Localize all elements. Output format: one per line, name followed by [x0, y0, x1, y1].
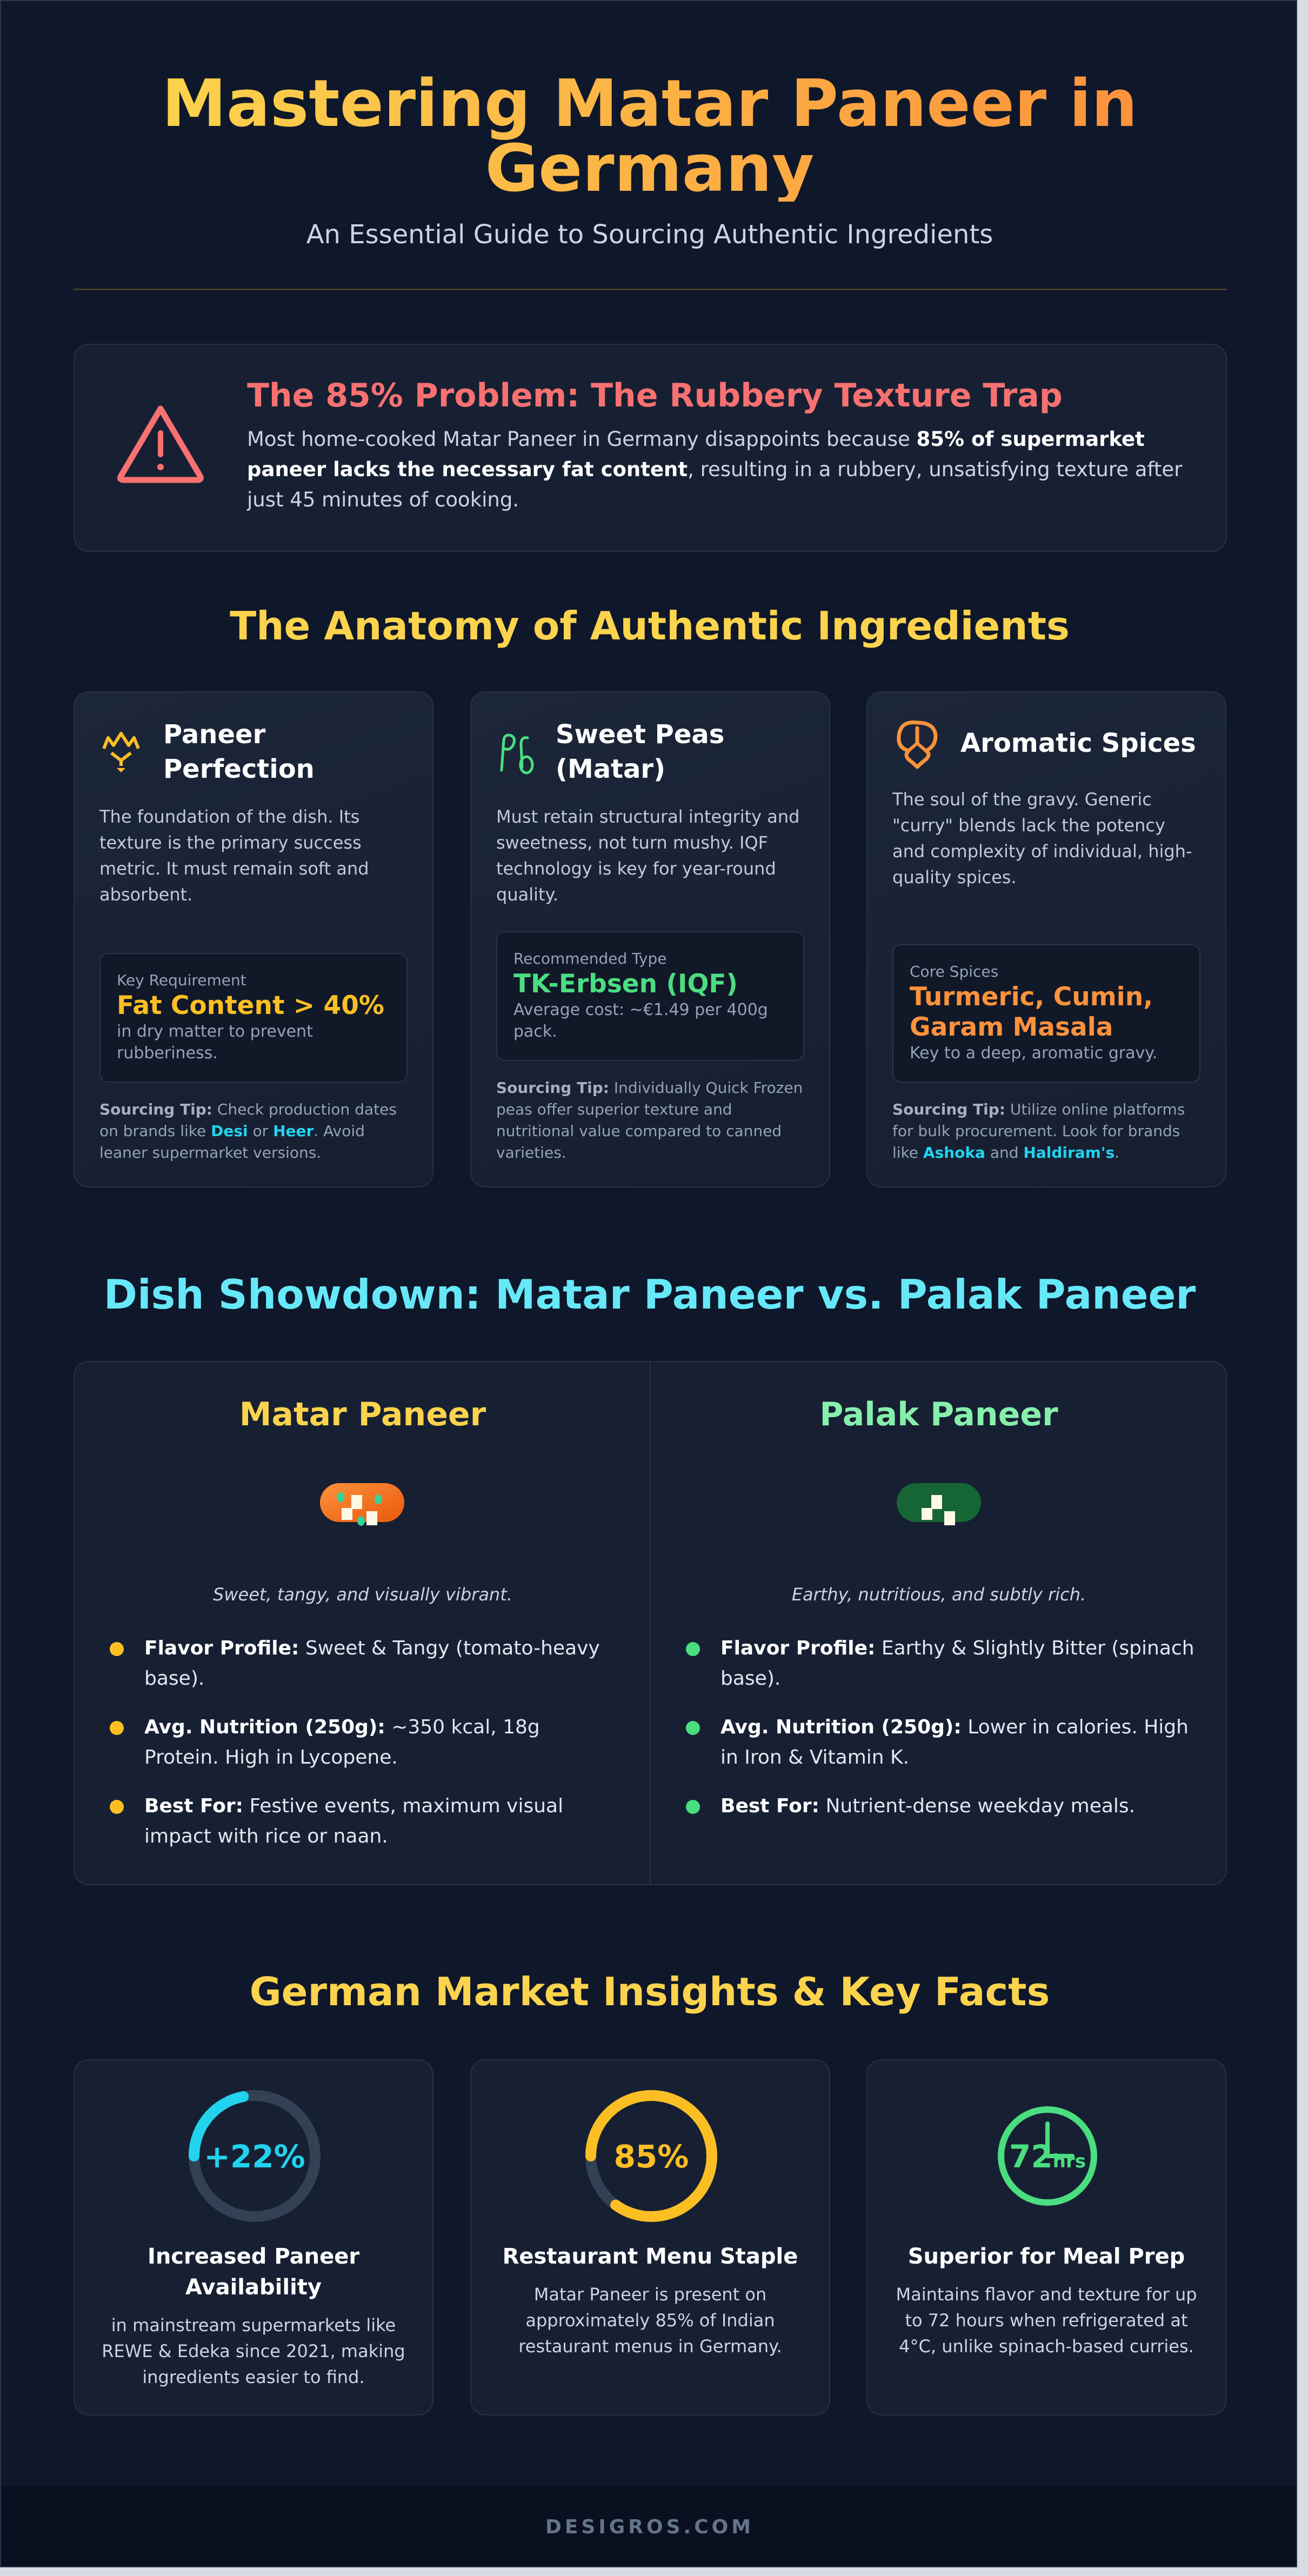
chart: ring 85%	[581, 2086, 722, 2226]
key requirement box: Fat Content > 40%	[117, 991, 384, 1020]
heading: anatomy: The Anatomy of Authentic Ingredients	[230, 603, 1070, 649]
problem heading: The 85% Problem: The Rubbery Texture Trap	[247, 377, 1063, 415]
icon: clock 72hrs	[977, 2086, 1118, 2226]
panel: stat availability: in mainstream supermarkets like REWE & Edeka since 2021, making ingredients easier to find.	[102, 2315, 405, 2387]
sourcing tip: Sourcing Tip: Individually Quick Frozen peas offer superior texture and nutritional value compared to canned varieties.	[496, 1079, 803, 1162]
recommended type box: Average cost: ~€1.49 per 400g pack.	[513, 1000, 768, 1041]
icon: spices	[897, 720, 937, 769]
core spices box	[892, 944, 1200, 1083]
chart: ring 85%: 85%	[614, 2138, 689, 2175]
panel: spices card: The soul of the gravy. Generic "curry" blends lack the potency and complexity of individual, high-quality spices.	[892, 789, 1192, 887]
sourcing tip: Sourcing Tip: Check production dates on brands like Desi or Heer. Avoid leaner supermarket versions.	[99, 1100, 397, 1162]
panel: paneer card: Paneer	[163, 719, 265, 750]
palak bullets	[686, 1637, 1194, 1817]
footer: DESIGROS.COM	[545, 2516, 754, 2538]
heading: showdown: Dish Showdown: Matar Paneer vs. Palak Paneer	[104, 1271, 1196, 1318]
recommended type box: TK-Erbsen (IQF)	[513, 969, 738, 999]
panel: paneer card: Perfection	[163, 754, 315, 784]
icon: matar dish	[320, 1483, 404, 1526]
column: palak paneer	[686, 1396, 1194, 1817]
sourcing tip: Sourcing Tip: Utilize online platforms for bulk procurement. Look for brands like Ashoka and Haldiram's.	[892, 1100, 1185, 1162]
palak bullets: Avg. Nutrition (250g): Lower in calories. High in Iron & Vitamin K.	[720, 1716, 1189, 1769]
panel: stat restaurant: Matar Paneer is present on approximately 85% of Indian restaurant menus in Germany.	[518, 2284, 782, 2357]
matar bullets	[110, 1637, 600, 1847]
subtitle: An Essential Guide to Sourcing Authentic Ingredients	[306, 219, 993, 250]
core spices box: Key to a deep, aromatic gravy.	[910, 1044, 1157, 1063]
panel: paneer card: The foundation of the dish. Its texture is the primary success metric. It must remain soft and absorbent.	[99, 806, 369, 905]
title	[162, 66, 1138, 206]
key requirement box: Key Requirement	[117, 971, 246, 989]
recommended type box	[496, 931, 804, 1061]
panel: spices card: Aromatic Spices	[960, 728, 1196, 758]
icon: palak dish	[897, 1483, 981, 1525]
icon: clock 72hrs: 72hrs	[1009, 2138, 1086, 2175]
palak bullets: Flavor Profile: Earthy & Slightly Bitter (spinach base).	[720, 1637, 1194, 1690]
title: Mastering Matar Paneer in	[162, 66, 1138, 142]
icon: paneer	[102, 732, 140, 772]
matar bullets: Best For: Festive events, maximum visual impact with rice or naan.	[144, 1795, 563, 1847]
panel: peas card: (Matar)	[556, 754, 665, 784]
column: palak paneer: Earthy, nutritious, and subtly rich.	[792, 1584, 1086, 1605]
column: matar paneer: Sweet, tangy, and visually vibrant.	[213, 1584, 512, 1605]
column: matar paneer: Matar Paneer	[239, 1396, 486, 1433]
icon: warning triangle	[117, 405, 204, 483]
recommended type box: Recommended Type	[513, 950, 666, 967]
panel: spices card	[866, 691, 1226, 1187]
panel: comparison	[74, 1361, 1227, 1885]
panel: stat availability: Increased Paneer Availability	[148, 2244, 359, 2300]
problem text: Most home-cooked Matar Paneer in Germany disappoints because 85% of supermarket paneer lacks the necessary fat content, resulting in a rubbery, unsatisfying texture after just 45 minutes of cooking.	[247, 428, 1182, 511]
chart: ring 22%: +22%	[204, 2138, 305, 2175]
matar bullets: Avg. Nutrition (250g): ~350 kcal, 18g Protein. High in Lycopene.	[144, 1716, 540, 1769]
panel: stat meal prep: Superior for Meal Prep	[908, 2244, 1185, 2269]
panel: stat availability	[74, 2059, 433, 2415]
core spices box: Core Spices	[910, 963, 998, 980]
panel: stat meal prep	[866, 2059, 1226, 2415]
column: palak paneer: Palak Paneer	[819, 1396, 1058, 1433]
matar bullets: Flavor Profile: Sweet & Tangy (tomato-heavy base).	[144, 1637, 600, 1690]
panel: peas card: Must retain structural integrity and sweetness, not turn mushy. IQF technology is key for year-round quality.	[496, 806, 799, 905]
panel: stat restaurant	[470, 2059, 830, 2415]
panel: peas card: Sweet Peas	[556, 719, 724, 750]
heading: insights: German Market Insights & Key Facts	[250, 1969, 1050, 2014]
core spices box: Turmeric, Cumin, Garam Masala	[910, 982, 1153, 1042]
panel: peas card	[470, 691, 830, 1187]
key requirement box: in dry matter to prevent rubberiness.	[117, 1022, 313, 1063]
title: Germany	[485, 131, 814, 206]
panel: problem callout	[74, 344, 1227, 552]
panel: stat meal prep: Maintains flavor and texture for up to 72 hours when refrigerated at 4°C, unlike spinach-based curries.	[896, 2284, 1197, 2357]
footer	[1, 2486, 1298, 2572]
palak bullets: Best For: Nutrient-dense weekday meals.	[720, 1795, 1135, 1817]
column: matar paneer	[110, 1396, 600, 1847]
panel: stat restaurant: Restaurant Menu Staple	[503, 2244, 798, 2269]
chart: ring 22%	[189, 2090, 321, 2222]
panel: paneer card	[74, 691, 433, 1187]
key requirement box	[99, 953, 408, 1083]
icon: peas	[500, 734, 534, 774]
